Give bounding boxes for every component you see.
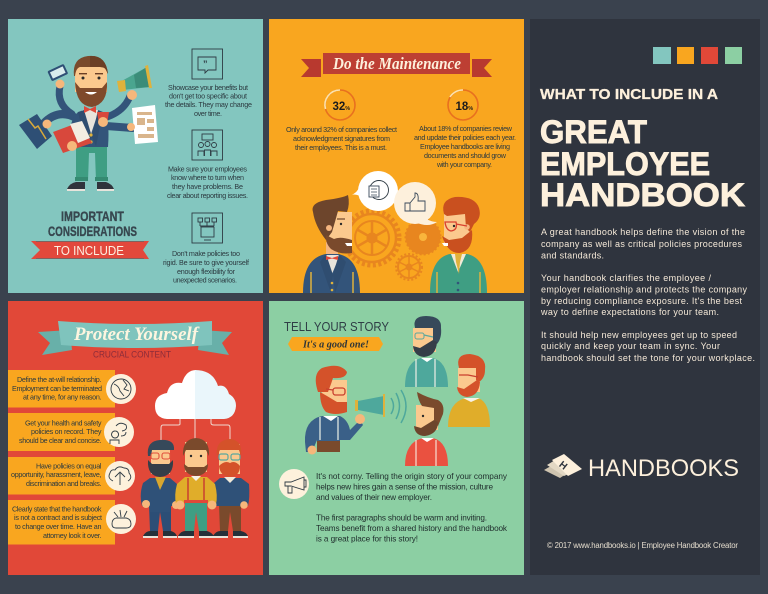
text: flexibility: unexpected scenarios. <box>173 276 237 284</box>
text: story paragraphs: Teams benefit from a shared history and the handbook <box>316 524 508 533</box>
legs <box>76 146 107 181</box>
item: not a contract: to change over time. Have an <box>15 522 102 531</box>
text: story paragraphs: helps new hires gain a sense of the mission, culture <box>316 482 493 492</box>
icon: flow chart <box>192 213 222 243</box>
text: story paragraphs: The first paragraphs should be warm and inviting. <box>316 514 487 522</box>
item: not a contract: Clearly state that the handbook <box>12 504 102 514</box>
heading: tell your story: TELL YOUR STORY <box>284 319 389 334</box>
text: intro paragraphs: It should help new employees get up to speed <box>541 330 737 340</box>
text: showcase benefits: the details. They may change <box>165 100 252 109</box>
text: where to turn: they have problems. Be <box>172 182 243 191</box>
banner: protect yourself <box>38 321 232 355</box>
text: flexibility: rigid. Be sure to give yourself <box>163 258 249 267</box>
text: intro paragraphs: and standards. <box>541 250 604 260</box>
heading: what to include: WHAT TO INCLUDE IN A <box>540 86 718 103</box>
item: at-will relationship: Employment can be terminated <box>12 384 102 393</box>
text: 32 percent note: Only around 32% of companies collect <box>286 125 397 134</box>
footer: copyright: © 2017 www.handbooks.io | Employee Handbook Creator <box>547 541 738 550</box>
illustration: multitasking man <box>19 56 158 191</box>
illustration: top listener <box>405 316 448 387</box>
panel: do the maintenance <box>269 19 524 293</box>
text: flexibility: Don't make policies too <box>172 249 240 258</box>
text: showcase benefits <box>165 83 252 118</box>
text: intro paragraphs: way to define expectations for your team. <box>540 307 719 317</box>
text: 18 percent note: About 18% of companies review <box>419 124 513 133</box>
panel: important considerations <box>8 19 263 293</box>
illustration: bottom listener <box>405 392 448 466</box>
text: intro paragraphs: A great handbook helps define the vision of the <box>541 227 745 237</box>
icon: speech bubble <box>192 49 222 79</box>
illustration: gears <box>345 211 440 280</box>
banner: protect yourself: Protect Yourself <box>73 324 200 345</box>
text: flexibility <box>163 249 249 284</box>
item: at-will relationship: Define the at-will relationship. <box>17 375 102 384</box>
man right <box>213 439 249 538</box>
text: 18 percent note: documents and should grow <box>424 151 507 160</box>
text: intro paragraphs: by reducing compliance exposure. It's the best <box>541 296 742 306</box>
item: health and safety: Get your health and safety <box>25 418 102 428</box>
text: where to turn: know where to turn when <box>171 173 244 182</box>
speech bubble: globe document <box>350 171 398 211</box>
panel: tell your story <box>269 301 524 575</box>
badge: it's a good one <box>288 337 383 351</box>
text: showcase benefits: over time. <box>194 109 222 118</box>
jacket <box>70 112 108 147</box>
text: intro paragraphs <box>540 227 755 363</box>
panel: title sidebar <box>530 19 760 575</box>
text: intro paragraphs: Your handbook clarifies the employee / <box>541 273 711 283</box>
illustration: right listener <box>448 354 490 427</box>
text: 18 percent note: with your company. <box>436 160 492 169</box>
text: where to turn: Make sure your employees <box>168 164 247 174</box>
text: intro paragraphs: company as well as critical policies procedures <box>541 239 742 249</box>
illustration: three men <box>141 438 249 538</box>
man middle <box>175 438 217 538</box>
stat: 32 percent: 32% <box>332 101 350 113</box>
text: story paragraphs: and values of their new employer. <box>316 493 432 502</box>
text: flexibility: enough flexibility for <box>177 267 236 276</box>
text: intro paragraphs: employer relationship and protects the company <box>541 284 748 294</box>
subheading: crucial content: CRUCIAL CONTENT <box>93 350 171 360</box>
text: 18 percent note: Employee handbooks are living <box>420 142 510 151</box>
item: at-will relationship <box>8 370 136 408</box>
logo: handbooks: HANDBOOKS <box>588 455 739 482</box>
text: story paragraphs: is a great place for this story! <box>316 534 418 544</box>
item: equal opportunity <box>8 457 135 494</box>
text: 32 percent note: acknowledgment signatures from <box>293 134 390 143</box>
banner: do the maintenance: Do the Maintenance <box>332 54 461 73</box>
ribbon: to include: TO INCLUDE <box>54 243 124 258</box>
text: story paragraphs <box>316 472 508 544</box>
stat: 32 percent <box>325 90 355 120</box>
item: health and safety: should be clear and concise. <box>19 436 102 445</box>
illustration: speaker with megaphone <box>305 366 406 454</box>
heading: important considerations: CONSIDERATIONS <box>48 223 137 239</box>
text: 18 percent note <box>414 124 516 169</box>
icon: team meeting <box>192 130 222 160</box>
icon: speech bubble: ” <box>203 59 208 69</box>
banner: do the maintenance <box>301 53 492 77</box>
text: where to turn <box>167 164 248 200</box>
text: 32 percent note: their employees. This is a must. <box>295 143 387 152</box>
title: great employee handbook: EMPLOYEE <box>540 146 710 182</box>
item: not a contract: attorney look it over. <box>43 531 102 540</box>
illustration: right man <box>430 197 487 293</box>
heading: important considerations <box>48 208 137 239</box>
item: not a contract <box>8 500 136 544</box>
heading: important considerations: IMPORTANT <box>61 208 124 224</box>
item: health and safety: policies on record. They <box>31 427 102 436</box>
text: intro paragraphs: quickly and keep your team in sync. Your <box>541 341 720 351</box>
item: equal opportunity: opportunity, harassment, leave, <box>11 470 102 479</box>
colour swatches <box>653 47 742 64</box>
title: great employee handbook: HANDBOOK <box>540 177 745 213</box>
head <box>75 60 107 92</box>
ribbon: to include <box>31 241 149 259</box>
text: showcase benefits: Showcase your benefits but <box>168 83 248 92</box>
stat: 18 percent: 18% <box>456 101 473 113</box>
text: story paragraphs: It's not corny. Telling the origin story of your company <box>316 472 508 481</box>
icon: megaphone <box>279 469 309 499</box>
item: equal opportunity: discrimination and breaks. <box>26 479 102 488</box>
item: equal opportunity: Have policies on equal <box>36 462 102 470</box>
text: where to turn: clear about reporting issues. <box>167 191 248 200</box>
item: health and safety <box>8 413 134 451</box>
man left <box>141 440 180 538</box>
text: 18 percent note: and update their policies each year. <box>414 133 516 142</box>
text: showcase benefits: don't get too specific about <box>169 92 247 100</box>
title: great employee handbook <box>540 114 745 213</box>
text: 32 percent note <box>286 125 397 152</box>
logo: handbooks: H <box>557 459 569 473</box>
panel: protect yourself <box>8 301 263 575</box>
speech bubble: thumbs up <box>394 182 437 225</box>
item: not a contract: is not a contract and is subject <box>14 513 102 522</box>
text: intro paragraphs: handbook should set the tone for your workplace. <box>541 353 755 363</box>
item: at-will relationship: at any time, for any reason. <box>23 392 102 402</box>
badge: it's a good one: It's a good one! <box>302 338 369 350</box>
illustration: cloud <box>155 370 236 443</box>
title: great employee handbook: GREAT <box>540 114 647 150</box>
stat: 18 percent <box>448 90 478 120</box>
illustration: left man <box>303 195 360 293</box>
